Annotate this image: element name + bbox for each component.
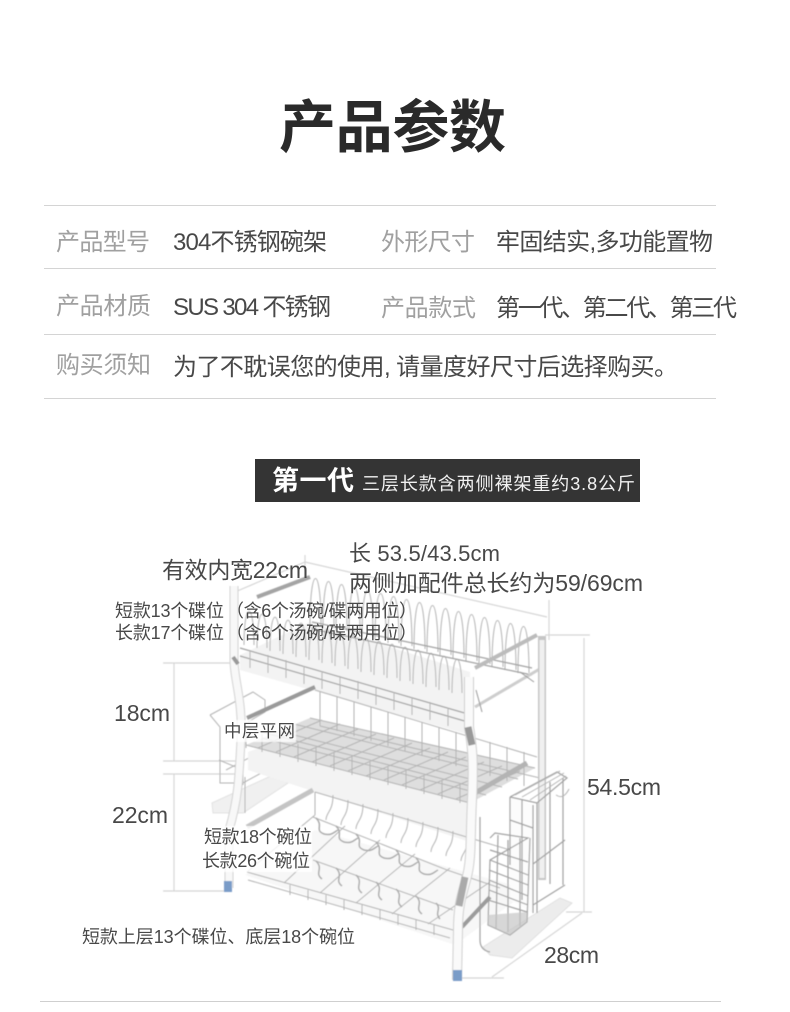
dish rack illustration [163, 555, 592, 981]
label: short bowl slots: 短款18个碗位 [204, 827, 312, 847]
label: 18cm: 18cm [114, 700, 170, 726]
rack side handles [247, 577, 537, 927]
label: long plate slots [115, 623, 417, 643]
back right post [538, 636, 546, 880]
spec row 1 [56, 229, 713, 256]
spec row 2 [56, 293, 737, 322]
middle tier mesh [246, 690, 540, 803]
spec row 1: 304不锈钢碗架 [173, 229, 327, 256]
label: short plate slots: 短款13个碟位 [115, 601, 224, 621]
drip tray right [483, 898, 572, 958]
generation banner [255, 459, 640, 502]
label backing: bowl positions [202, 826, 312, 872]
front left post [224, 586, 241, 892]
spec row 1: 外形尺寸 [381, 229, 475, 256]
title: 产品参数 [279, 96, 506, 160]
left utensil holder [210, 692, 288, 813]
label: 54.5cm: 54.5cm [587, 774, 661, 800]
top tier tray [240, 622, 470, 735]
label: middle mesh: 中层平网 [224, 721, 295, 741]
note: short version slots: 短款上层13个碟位、底层18个碗位 [82, 927, 355, 947]
middle tier mesh floor [246, 718, 535, 803]
spec row 2: 产品材质 [56, 293, 151, 320]
spoon basket [488, 833, 530, 935]
knife holder [480, 771, 569, 952]
middle tier tray [248, 730, 470, 842]
footer rule [40, 1000, 721, 1002]
label: short plate slots: （含6个汤碗/碟两用位） [226, 601, 417, 621]
spec row 3: 为了不耽误您的使用, 请量度好尺寸后选择购买。 [173, 354, 678, 381]
spec row 2: 第一代、第二代、第三代 [496, 295, 737, 322]
label: long plate slots: 长款17个碟位 [115, 623, 224, 643]
spec row 1: 产品型号 [56, 229, 150, 256]
label backing: middle mesh [224, 720, 296, 742]
label: length: 长 53.5/43.5cm [349, 541, 500, 566]
bottom tier bowl rack [247, 792, 530, 938]
dimension lines [163, 555, 592, 978]
bottom tier shadow tray [245, 830, 530, 945]
generation banner: 第一代 [272, 466, 354, 496]
label: short plate slots [115, 601, 417, 621]
spec row 1: 牢固结实,多功能置物 [496, 229, 713, 256]
top tier rails [240, 622, 543, 726]
label: total length: 两侧加配件总长约为59/69cm [349, 570, 643, 596]
label: long bowl slots: 长款26个碗位 [202, 851, 310, 871]
spec table [44, 206, 737, 398]
front right post [453, 677, 473, 981]
spec row 2: SUS 304 不锈钢 [173, 294, 331, 321]
label: 22cm: 22cm [112, 802, 168, 828]
label: inner width: 有效内宽22cm [162, 557, 308, 583]
top tier plate wires front row [244, 611, 462, 693]
label: 28cm: 28cm [544, 942, 599, 968]
label: long plate slots: （含6个汤碗/碟两用位） [226, 623, 417, 643]
top tier plate wires back row [310, 578, 529, 673]
spec row 3: 购买须知 [56, 352, 151, 379]
spec row 2: 产品款式 [381, 295, 476, 322]
generation banner: 三层长款含两侧裸架重约3.8公斤 [362, 474, 635, 494]
